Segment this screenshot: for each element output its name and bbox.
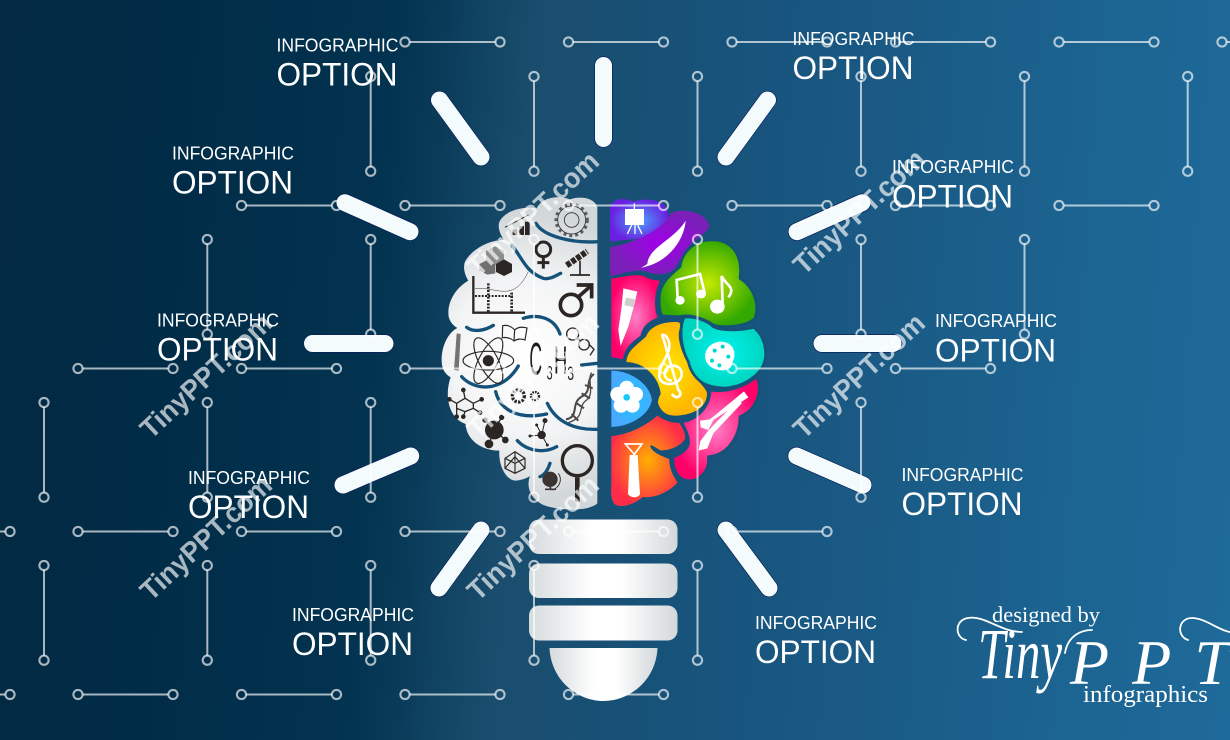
- icon: dna helix: [566, 373, 594, 423]
- logo script: Tiny: Tiny: [978, 614, 1062, 694]
- text: option upper right: INFOGRAPHIC: [892, 157, 1014, 177]
- brain: left analytical hemisphere: [442, 197, 597, 510]
- text: option bottom right: OPTION: [755, 634, 876, 670]
- lobe: pink brushes: [673, 377, 759, 481]
- chemical formula: H: [554, 338, 567, 382]
- icon: molecule network: [448, 388, 483, 418]
- icon: hexagons: [479, 246, 512, 276]
- chemical formula: 3: [567, 364, 574, 385]
- icon: treble clef: [659, 335, 682, 397]
- icon: music notes: [675, 274, 731, 314]
- lobe divider strokes: [462, 223, 597, 477]
- text: option lower right: OPTION: [902, 486, 1022, 522]
- text: option lower left: INFOGRAPHIC: [188, 468, 310, 488]
- watermarks: TinyPPT.com: [461, 469, 605, 606]
- lobe: green music: [659, 240, 757, 327]
- science icons: [448, 204, 594, 502]
- text: option top right: [792, 29, 914, 86]
- watermarks: TinyPPT.com: [787, 307, 931, 444]
- chemical formula: C: [529, 333, 542, 384]
- icon: palette: [705, 342, 734, 370]
- text: option middle left: OPTION: [157, 332, 278, 368]
- text: option upper left: OPTION: [172, 164, 293, 200]
- lobe: orange tie: [610, 414, 686, 507]
- text: option upper right: [892, 157, 1014, 214]
- text: option lower left: OPTION: [188, 489, 309, 525]
- lobe: yellow clef: [625, 321, 708, 417]
- text: option middle right: INFOGRAPHIC: [935, 311, 1057, 331]
- icon: globe: [542, 472, 560, 490]
- icon: magnifier: [562, 446, 592, 502]
- icon: gears: [512, 390, 539, 402]
- lobe: teal palette: [681, 317, 766, 388]
- logo script: PPT: PPT: [1069, 627, 1230, 698]
- text: option top left: OPTION: [276, 56, 398, 92]
- watermarks: TinyPPT.com: [461, 307, 605, 444]
- icon: atom: [463, 334, 514, 387]
- icon: easel: [625, 203, 644, 234]
- text: option bottom right: [755, 613, 877, 670]
- left lobes silhouette: [442, 197, 597, 510]
- bulb bar 2: [529, 564, 678, 598]
- chemical formula: 3: [547, 363, 553, 384]
- icon: glasses: [567, 328, 594, 355]
- icon: ruler: [454, 333, 461, 371]
- text: option bottom left: OPTION: [292, 626, 413, 662]
- logo swashes: [958, 618, 1230, 653]
- text: option top left: INFOGRAPHIC: [276, 36, 398, 56]
- text: option lower right: INFOGRAPHIC: [902, 465, 1024, 485]
- text: option top right: INFOGRAPHIC: [792, 29, 914, 49]
- watermarks: TinyPPT.com: [787, 143, 931, 280]
- icon: bar chart: [505, 215, 530, 235]
- icon: large molecule: [483, 415, 508, 448]
- text: option bottom left: INFOGRAPHIC: [292, 605, 414, 625]
- lobe: pink paintbrush: [610, 274, 662, 361]
- text: option middle left: [157, 310, 279, 368]
- text: option middle right: OPTION: [935, 332, 1056, 368]
- bulb dome: [550, 648, 658, 701]
- icon: small molecule: [529, 419, 548, 446]
- icon: necktie: [625, 444, 642, 497]
- icon: crossed brushes: [699, 391, 748, 451]
- icon: venus symbol: [536, 242, 551, 269]
- icon: mars symbol: [560, 285, 592, 316]
- light rays: [312, 66, 893, 588]
- watermarks: TinyPPT.com: [134, 469, 278, 606]
- icon: gear: [556, 204, 587, 236]
- text: option bottom left: [292, 605, 414, 662]
- lobe: violet feather: [610, 211, 709, 276]
- text: option middle left: INFOGRAPHIC: [157, 310, 279, 330]
- text: option upper left: INFOGRAPHIC: [172, 144, 294, 164]
- lobe: purple easel: [610, 199, 668, 242]
- watermarks: TinyPPT.com: [134, 307, 278, 444]
- icon: paintbrush: [618, 288, 637, 346]
- logo line: infographics: infographics: [1083, 682, 1208, 708]
- icon: telescope: [567, 251, 590, 275]
- logo line: designed by: designed by: [992, 602, 1100, 627]
- text: option upper left: [172, 144, 294, 200]
- brain: right creative hemisphere: [610, 199, 766, 507]
- lightbulb base: [529, 520, 678, 701]
- icon: open book: [502, 325, 527, 341]
- lobe: blue flower: [610, 369, 653, 428]
- text: option top right: OPTION: [792, 50, 914, 86]
- text: option bottom right: INFOGRAPHIC: [755, 613, 877, 633]
- watermarks: TinyPPT.com: [461, 145, 605, 282]
- logo: designed by TinyPPT infographics: [958, 602, 1230, 708]
- creative icons: [610, 203, 748, 497]
- text: option middle right: [935, 311, 1057, 368]
- text: option upper right: OPTION: [892, 178, 1013, 214]
- text: option lower left: [188, 468, 310, 525]
- watermarks: [134, 143, 931, 606]
- bulb bar 3: [529, 606, 678, 640]
- icon: flower: [610, 381, 643, 413]
- text: option top left: [276, 36, 398, 92]
- icon: graph: [473, 272, 528, 313]
- icon: feather: [641, 221, 686, 268]
- text: option lower right: [902, 465, 1024, 522]
- icon: wire cube: [505, 452, 525, 473]
- bulb bar 1: [529, 520, 678, 554]
